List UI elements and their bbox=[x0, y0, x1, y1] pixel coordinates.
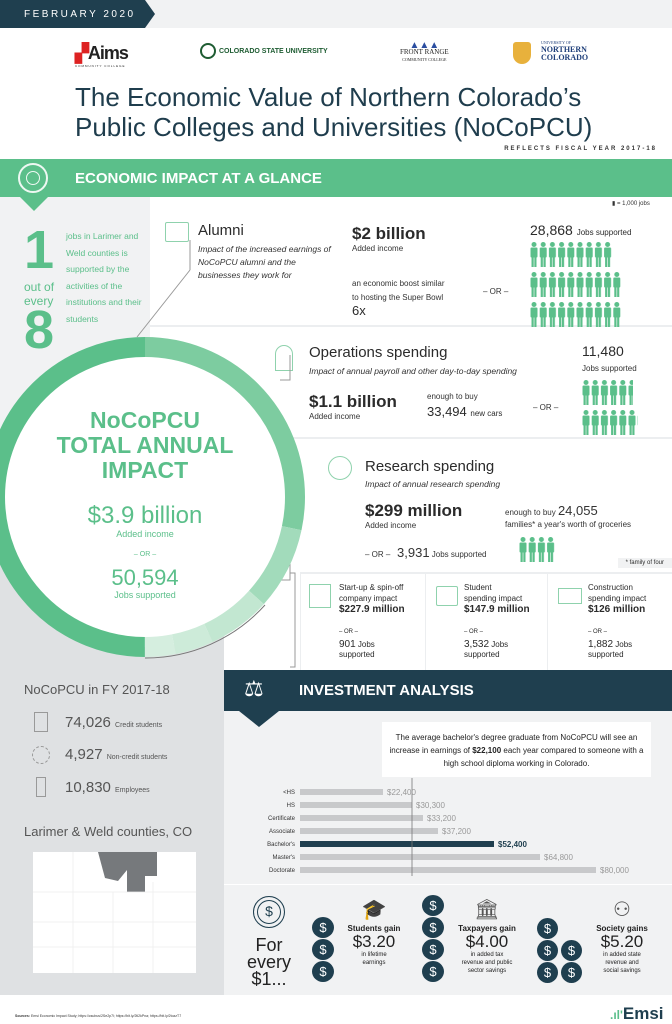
coins: taxpayers: $ bbox=[429, 898, 437, 913]
panel: three small impacts: $126 million bbox=[588, 604, 645, 615]
logo: CSU: COLORADO STATE UNIVERSITY bbox=[219, 48, 328, 55]
panel: three small impacts: – OR – bbox=[588, 629, 607, 635]
coins: society: $ bbox=[544, 965, 551, 980]
text: taxpayers gain: revenue and public bbox=[462, 960, 512, 966]
panel: three small impacts: – OR – bbox=[339, 629, 358, 635]
coins: taxpayers: $ bbox=[429, 920, 437, 935]
investment analysis band bbox=[224, 670, 672, 711]
text: taxpayers gain: $4.00 bbox=[466, 932, 508, 951]
legend: person = 1000 jobs: ▮ = 1,000 jobs bbox=[612, 201, 650, 207]
text: taxpayers gain: 🏛 bbox=[474, 899, 500, 921]
panel: operations bbox=[150, 329, 672, 439]
text: taxpayers gain: sector savings bbox=[468, 968, 506, 974]
coins: students: $ bbox=[319, 942, 327, 957]
bar chart: earnings by education bbox=[267, 778, 629, 876]
panel: alumni bbox=[150, 197, 672, 327]
bar chart: earnings by education: $33,200 bbox=[427, 814, 456, 823]
panel: three small impacts: supported bbox=[339, 650, 375, 659]
panel: operations: Impact of annual payroll and other day-to-day spending bbox=[309, 366, 517, 376]
bar chart: earnings by education: HS bbox=[287, 803, 295, 809]
bar chart: earnings by education: Bachelor's bbox=[267, 842, 295, 848]
icon: gear bbox=[32, 746, 50, 764]
icon: big coin bbox=[253, 896, 285, 928]
bar chart: earnings by education: <HS bbox=[283, 790, 295, 796]
text: society gains: $5.20 bbox=[601, 932, 643, 951]
panel: alumni: $2 billion bbox=[352, 224, 426, 243]
panel: three small impacts: Student bbox=[464, 583, 492, 592]
callout: bachelor's earnings: The average bachelor's degree graduate from NoCoPCU will see an increase in earnings of $22,100 each year compared to someone with a high school diploma working in Colorado. bbox=[390, 733, 643, 768]
pictogram: research jobs bbox=[520, 537, 554, 562]
icon: card bbox=[436, 586, 458, 606]
bar chart: earnings by education: Certificate bbox=[268, 816, 296, 822]
bar chart: earnings by education: $64,800 bbox=[544, 853, 573, 862]
icon: briefcase bbox=[165, 222, 189, 242]
stat: 1 out of 8: 1 bbox=[24, 220, 54, 280]
donut center text: – OR – bbox=[134, 551, 156, 558]
icon: atom bbox=[328, 456, 352, 480]
bar chart: earnings by education: $22,400 bbox=[387, 788, 416, 797]
panel: operations: Jobs supported bbox=[582, 364, 637, 373]
heading: investment analysis: INVESTMENT ANALYSIS bbox=[299, 682, 474, 699]
donut center text: NoCoPCU bbox=[90, 407, 200, 433]
text: students gain: in lifetime bbox=[361, 952, 387, 958]
map: Colorado bbox=[33, 852, 196, 973]
stat: 1 out of 8 bbox=[24, 220, 142, 360]
logo: FRCC bbox=[400, 40, 449, 62]
coins: society: $ bbox=[568, 965, 575, 980]
panel: research: enough to buy 24,055 bbox=[505, 503, 598, 518]
panel: research: Impact of annual research spending bbox=[365, 479, 500, 489]
donut chart: total impact bbox=[0, 240, 305, 668]
panel: research: Research spending bbox=[365, 458, 494, 475]
icon: building bbox=[275, 345, 293, 371]
panel: alumni: Impact of the increased earnings of NoCoPCU alumni and the businesses they work for bbox=[198, 244, 331, 280]
panel: three small impacts: 1,882 Jobs bbox=[588, 639, 632, 650]
chart area background bbox=[224, 711, 672, 884]
donut center text: TOTAL ANNUAL bbox=[57, 432, 233, 458]
coins: society: $ bbox=[544, 921, 551, 936]
panel: three small impacts: spending impact bbox=[464, 594, 522, 603]
panel: return per dollar bbox=[224, 885, 672, 995]
logo: FRCC: ▲▲▲ bbox=[409, 40, 439, 51]
panel: operations: Operations spending bbox=[309, 344, 447, 361]
panel: research: – OR – 3,931 Jobs supported bbox=[365, 545, 486, 560]
panel: research: Added income bbox=[365, 521, 416, 530]
panel: alumni: Added income bbox=[352, 244, 403, 253]
text: society gains: revenue and bbox=[605, 960, 639, 966]
panel: alumni: an economic boost similar bbox=[352, 279, 444, 288]
panel: operations: 33,494 new cars bbox=[427, 404, 502, 419]
panel: three small impacts: 3,532 Jobs bbox=[464, 639, 508, 650]
panel: NoCoPCU FY stats: NoCoPCU in FY 2017-18 bbox=[24, 682, 170, 697]
heading: economic impact: ECONOMIC IMPACT AT A GLANCE bbox=[75, 170, 322, 187]
green band header bbox=[0, 159, 672, 197]
icon: scales: ⚖ bbox=[244, 676, 264, 701]
text: for every $1: For every $1... bbox=[247, 935, 291, 989]
coins: taxpayers: $ bbox=[429, 964, 437, 979]
panel: operations: – OR – bbox=[533, 403, 558, 412]
logo: UNC: COLORADO bbox=[541, 53, 588, 62]
bar chart: earnings by education: $52,400 bbox=[498, 840, 527, 849]
panel: three small impacts: spending impact bbox=[588, 594, 646, 603]
panel: alumni: to hosting the Super Bowl bbox=[352, 293, 443, 302]
bar chart: earnings by education: $80,000 bbox=[600, 866, 629, 875]
panel: NoCoPCU FY stats: 10,830 Employees bbox=[65, 779, 150, 796]
pictogram: operations jobs bbox=[582, 380, 638, 435]
text: society gains: ⚇ bbox=[613, 899, 631, 921]
subtitle: fiscal year: REFLECTS FISCAL YEAR 2017-18 bbox=[504, 146, 657, 152]
note: family of four bbox=[618, 558, 672, 568]
donut center text: $3.9 billion bbox=[88, 502, 202, 529]
logo: Aims: COMMUNITY COLLEGE bbox=[75, 64, 125, 68]
panel: three small impacts: Start-up & spin-off company impact bbox=[339, 583, 403, 603]
panel: NoCoPCU FY stats bbox=[24, 682, 170, 797]
callout: bachelor's earnings bbox=[382, 722, 651, 777]
panel: three small impacts: Construction bbox=[588, 583, 633, 592]
panel: three small impacts: supported bbox=[464, 650, 500, 659]
donut center text: 50,594 bbox=[111, 565, 179, 590]
icon: globe bbox=[18, 163, 48, 193]
panel: NoCoPCU FY stats: 74,026 Credit students bbox=[65, 714, 162, 731]
stat: 1 out of 8: every bbox=[24, 294, 53, 308]
logo: UNC bbox=[513, 40, 588, 64]
text: society gains: Society gains bbox=[596, 924, 648, 933]
panel: three small impacts: 901 Jobs bbox=[339, 639, 375, 650]
icon: diploma bbox=[34, 712, 48, 732]
bar chart: earnings by education: Doctorate bbox=[269, 868, 296, 874]
bar chart: earnings by education: $30,300 bbox=[416, 801, 445, 810]
text: society gains: social savings bbox=[603, 968, 641, 974]
text: taxpayers gain: Taxpayers gain bbox=[458, 924, 516, 933]
logo: UNC: UNIVERSITY OF bbox=[541, 40, 571, 45]
pictogram: alumni jobs bbox=[530, 242, 620, 327]
icon: city bbox=[309, 584, 331, 608]
panel: alumni: 28,868 Jobs supported bbox=[530, 222, 631, 238]
panel: NoCoPCU FY stats: 4,927 Non-credit students bbox=[65, 746, 167, 763]
logo: FRCC: COMMUNITY COLLEGE bbox=[402, 57, 446, 62]
logo: FRCC: FRONT RANGE bbox=[400, 48, 449, 56]
panel: alumni: Alumni bbox=[198, 222, 244, 239]
text: taxpayers gain: in added tax bbox=[471, 952, 503, 958]
logo: CSU bbox=[200, 43, 328, 59]
panel: three small impacts: – OR – bbox=[464, 629, 483, 635]
icon: truck bbox=[558, 588, 582, 604]
text: society gains: in added state bbox=[603, 952, 641, 958]
bar chart: earnings by education: $37,200 bbox=[442, 827, 471, 836]
bar chart: earnings by education: Associate bbox=[269, 829, 296, 835]
panel: alumni: – OR – bbox=[483, 287, 508, 296]
text: students gain: earnings bbox=[362, 960, 386, 966]
coins: students: $ bbox=[319, 964, 327, 979]
footer: sources: Sources: Emsi Economic Impact Study; https://csubus/2Se2p7l; https://bit.ly/2tl2kPna; https://bit.ly/2tozzT7 bbox=[15, 1014, 181, 1018]
stat: 1 out of 8: 8 bbox=[24, 300, 54, 360]
stat: 1 out of 8: out of bbox=[24, 280, 54, 294]
panel: operations: enough to buy bbox=[427, 392, 478, 401]
heading: Larimer & Weld: Larimer & Weld counties, CO bbox=[24, 824, 192, 839]
donut center text: IMPACT bbox=[102, 457, 188, 483]
coins: taxpayers: $ bbox=[429, 942, 437, 957]
title: The Economic Value of Northern Colorado’s Public Colleges and Universities (NoCoPCU) bbox=[75, 82, 592, 142]
logo: Aims: ▞Aims bbox=[75, 43, 128, 63]
panel: three small impacts: supported bbox=[588, 650, 624, 659]
panel: alumni: 6x bbox=[352, 303, 366, 318]
panel: three small impacts: $147.9 million bbox=[464, 604, 530, 615]
panel: research bbox=[328, 456, 672, 568]
coins: society bbox=[537, 918, 582, 983]
logo: Emsi: .ıl'Emsi bbox=[610, 1004, 664, 1023]
bar chart: earnings by education: Master's bbox=[273, 855, 295, 861]
coins: taxpayers bbox=[422, 895, 444, 982]
text: students gain: Students gain bbox=[348, 924, 400, 933]
date tab: FEBRUARY 2020 bbox=[24, 9, 136, 20]
coins: society: $ bbox=[568, 943, 575, 958]
panel: operations: $1.1 billion bbox=[309, 392, 397, 411]
text: students gain: 🎓 bbox=[362, 899, 386, 921]
text: taxpayers gain bbox=[458, 899, 516, 974]
text: students gain bbox=[348, 899, 400, 966]
panel: three small impacts: $227.9 million bbox=[339, 604, 405, 615]
coins: students: $ bbox=[319, 920, 327, 935]
panel: research: $299 million bbox=[365, 501, 462, 520]
donut center text: Added income bbox=[116, 529, 174, 539]
text: society gains bbox=[596, 899, 648, 974]
panel: operations: 11,480 bbox=[582, 343, 624, 359]
icon: big coin: $ bbox=[265, 903, 273, 919]
donut center text bbox=[56, 407, 233, 600]
left dark column bbox=[0, 560, 224, 995]
coins: society: $ bbox=[544, 943, 551, 958]
donut center text: Jobs supported bbox=[114, 590, 176, 600]
text: students gain: $3.20 bbox=[353, 932, 395, 951]
left light column bbox=[0, 197, 150, 597]
panel: research: families* a year's worth of groceries bbox=[505, 520, 631, 529]
top bar bbox=[0, 0, 672, 28]
coins: students bbox=[312, 917, 334, 982]
logos bbox=[74, 40, 588, 68]
panel: three small impacts bbox=[300, 572, 672, 670]
icon: employee bbox=[36, 777, 46, 797]
stat: 1 out of 8: jobs in Larimer and Weld counties is supported by the activities of the institutions and their students bbox=[66, 231, 142, 324]
note: family of four: * family of four bbox=[626, 560, 664, 566]
date tab bbox=[0, 0, 155, 28]
logo: UNC: NORTHERN bbox=[541, 45, 587, 54]
panel: operations: Added income bbox=[309, 412, 360, 421]
